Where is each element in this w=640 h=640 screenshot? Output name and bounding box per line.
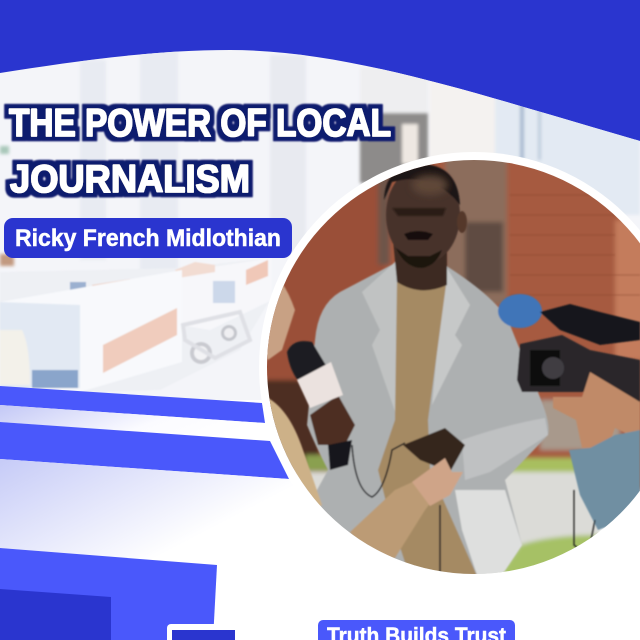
hospital beds bbox=[0, 258, 272, 395]
author pill bbox=[4, 218, 292, 258]
top blue header band bbox=[0, 0, 640, 145]
reaching arm and hand bbox=[350, 482, 428, 558]
camera operator jacket bbox=[569, 430, 640, 530]
small card at bottom bbox=[167, 624, 240, 640]
video camera bbox=[517, 304, 640, 405]
microphone cable bbox=[352, 443, 405, 497]
author pill: Ricky French Midlothian bbox=[15, 225, 281, 252]
brick courses bbox=[588, 194, 640, 296]
title: THE POWER OF LOCAL bbox=[9, 102, 391, 145]
foreground reporter shoulder bbox=[270, 398, 322, 506]
gradient panel below stripes bbox=[0, 459, 340, 565]
background photo: hospital ward bbox=[0, 40, 640, 400]
blue microphone bbox=[498, 294, 542, 328]
lower blue panel bbox=[0, 548, 217, 640]
title bbox=[9, 102, 391, 201]
gradient band between stripes bbox=[0, 405, 272, 442]
journalist shirt bbox=[378, 280, 478, 578]
diagonal blue stripe 2 bbox=[0, 422, 289, 479]
camera operator hands bbox=[553, 372, 640, 448]
journalist hands bbox=[403, 428, 465, 472]
diagonal blue stripe 1 bbox=[0, 386, 265, 423]
reporter handheld microphone bbox=[287, 341, 343, 408]
building background bbox=[260, 150, 640, 600]
journalist neck and head bbox=[393, 240, 447, 290]
title: JOURNALISM bbox=[10, 158, 250, 201]
journalist jacket bbox=[306, 262, 549, 578]
circular photo: journalist being interviewed bbox=[259, 150, 640, 600]
lower dark blue block bbox=[0, 589, 111, 640]
